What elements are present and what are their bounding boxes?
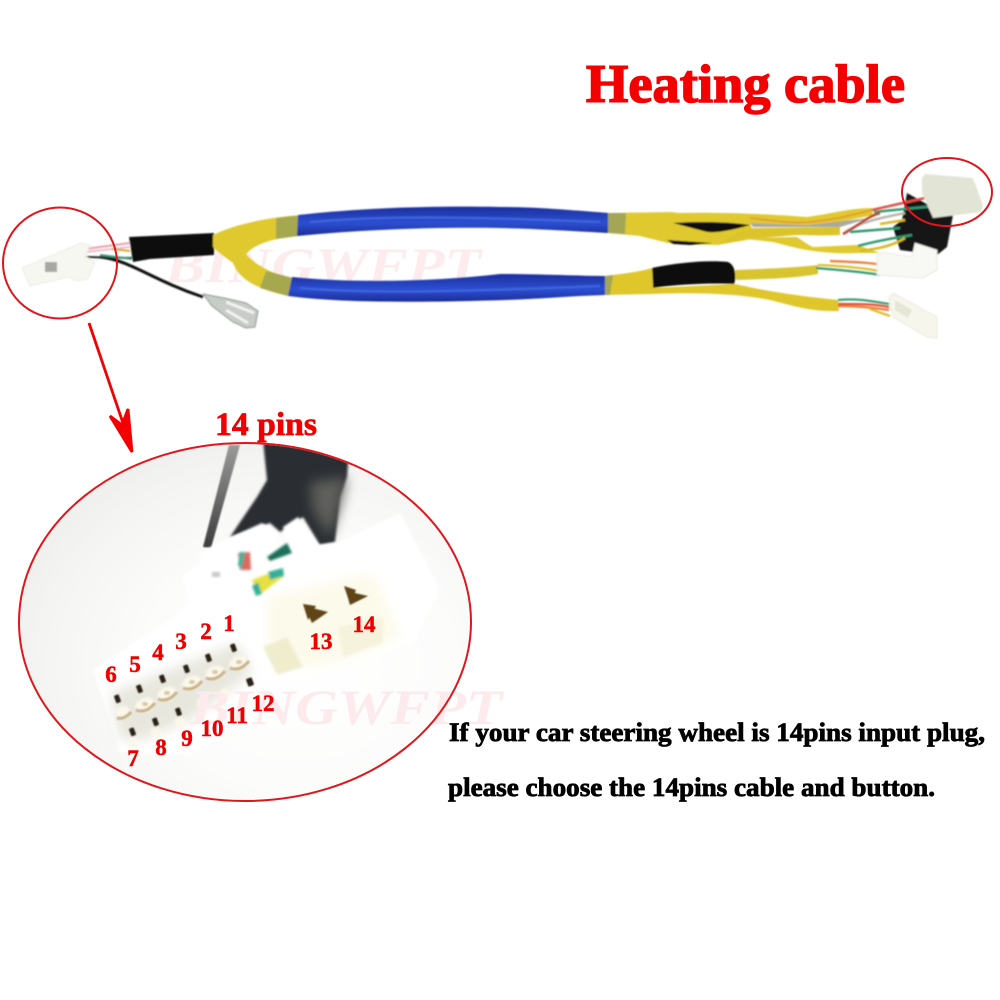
magnified connector panel [19,440,505,801]
watermark: lower: BINGWFPT [189,679,505,735]
watermark: upper: BINGWFPT [164,237,484,293]
pin numbers: 1 [223,611,235,636]
pin numbers: 12 [252,691,274,716]
callout circle: left connector [3,208,117,318]
left wires [85,243,132,259]
socket shadows [117,661,249,718]
pin numbers: 5 [129,652,141,677]
gray wire [203,445,240,548]
left connector [22,243,95,286]
instruction text: please choose the 14pins cable and button. [448,773,935,802]
black sleeve left [129,233,214,262]
lower black sleeve [652,261,735,288]
right connector, middle [877,243,937,278]
terminals 13 and 14 [303,586,368,623]
instruction text [448,718,985,802]
ground wire and spade terminal [100,257,258,328]
upper yellow mass [608,212,757,245]
panel ellipse background [19,443,471,801]
arrow [89,323,132,452]
pin numbers: 9 [181,726,193,751]
pin numbers: 3 [175,629,187,654]
callout circle: right connector [902,158,992,226]
upper yellow branches [673,208,873,228]
pin numbers: 6 [105,662,117,687]
instruction text: If your car steering wheel is 14pins input plug, [449,718,985,747]
pin numbers: 10 [200,716,224,741]
connector details [212,543,383,675]
lower blue sleeve [288,274,606,302]
lower branch wires [816,261,890,316]
pin numbers: 13 [310,629,332,654]
panel ellipse outline [19,443,471,801]
pin numbers: 14 [352,612,376,637]
socket rims [114,653,251,748]
pin numbers: 8 [155,735,167,760]
right connector, upper [922,174,983,218]
black braided sleeve [230,440,350,545]
lower yellow [605,268,839,311]
pin numbers [105,611,376,771]
right face shading [267,573,400,667]
yellow tape junction [213,215,302,296]
socket centres [142,660,242,706]
upper blue sleeve [297,207,609,236]
pin sockets [114,643,254,736]
upper branch wires [843,198,935,251]
right connector, lower [889,293,937,338]
connector body [206,516,402,550]
pin count label: 14 pins [215,407,317,443]
black clip [893,193,953,255]
pin numbers: 7 [127,746,139,771]
pin numbers: 2 [200,619,212,644]
cable harness photo [22,174,983,338]
title: Heating cable [586,54,905,114]
pin face shading [110,643,253,740]
pin numbers: 4 [152,640,164,665]
pin numbers: 11 [226,703,248,728]
connector photo [112,444,402,747]
